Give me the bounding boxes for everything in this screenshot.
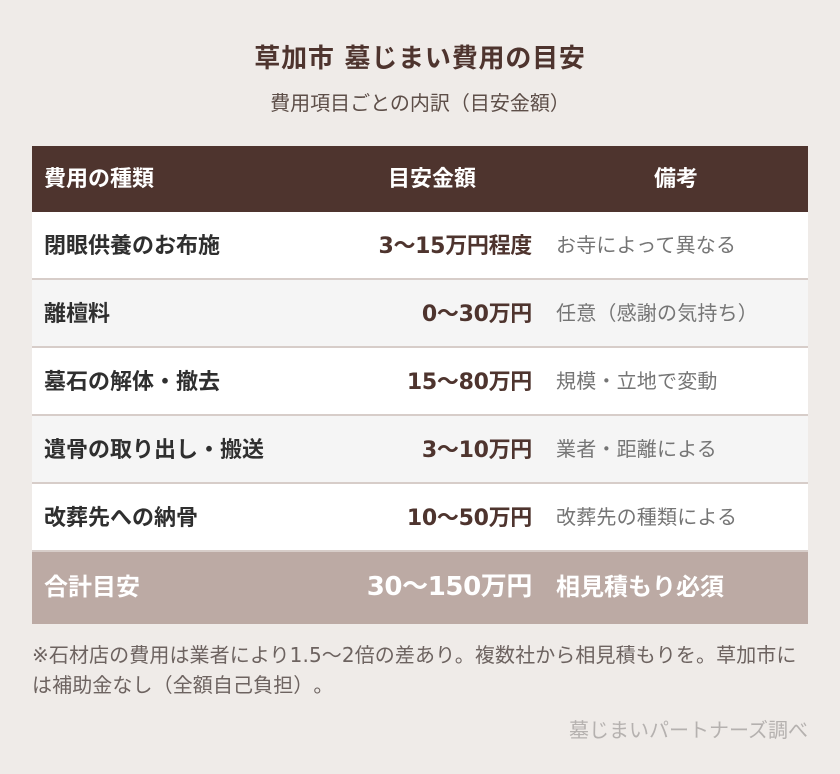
title: 草加市 墓じまい費用の目安 — [254, 44, 586, 74]
subtitle: 費用項目ごとの内訳（目安金額） — [270, 91, 570, 115]
source credit: 墓じまいパートナーズ調べ — [569, 718, 808, 742]
row: 墓石の解体・撤去: 15～80万円 — [407, 370, 532, 395]
row: 閉眼供養のお布施 — [32, 212, 808, 280]
total row — [32, 552, 808, 624]
row: 閉眼供養のお布施: 3～15万円程度 — [378, 234, 532, 259]
row: 遺骨の取り出し・搬送: 3～10万円 — [422, 438, 532, 463]
row: 改葬先への納骨 — [32, 484, 808, 552]
row: 離檀料 — [32, 280, 808, 348]
total label: 合計目安 — [44, 573, 140, 601]
row: 閉眼供養のお布施: お寺によって異なる — [556, 233, 736, 257]
row: 閉眼供養のお布施: 閉眼供養のお布施 — [44, 234, 220, 259]
row: 遺骨の取り出し・搬送: 遺骨の取り出し・搬送 — [44, 438, 264, 463]
row: 改葬先への納骨: 改葬先の種類による — [556, 505, 737, 529]
footnote: は補助金なし（全額自己負担）。 — [32, 673, 334, 697]
table header — [32, 146, 808, 212]
row: 改葬先への納骨: 改葬先への納骨 — [44, 506, 198, 531]
total amount: 30～150万円 — [367, 572, 532, 602]
row: 離檀料: 離檀料 — [44, 302, 110, 327]
row: 遺骨の取り出し・搬送: 業者・距離による — [556, 437, 717, 461]
row: 離檀料: 0～30万円 — [422, 302, 532, 327]
row: 墓石の解体・撤去: 墓石の解体・撤去 — [44, 370, 220, 395]
total note: 相見積もり必須 — [556, 573, 724, 601]
footnote — [32, 643, 796, 697]
row: 墓石の解体・撤去: 規模・立地で変動 — [556, 369, 718, 393]
header: notes: 備考 — [654, 167, 698, 192]
header: cost type: 費用の種類 — [44, 167, 154, 192]
row: 離檀料: 任意（感謝の気持ち） — [556, 301, 758, 325]
footnote: ※石材店の費用は業者により1.5～2倍の差あり。複数社から相見積もりを。草加市に — [32, 643, 796, 667]
row: 遺骨の取り出し・搬送 — [32, 416, 808, 484]
header: amount: 目安金額 — [388, 167, 476, 192]
row: 改葬先への納骨: 10～50万円 — [407, 506, 532, 531]
row: 墓石の解体・撤去 — [32, 348, 808, 416]
